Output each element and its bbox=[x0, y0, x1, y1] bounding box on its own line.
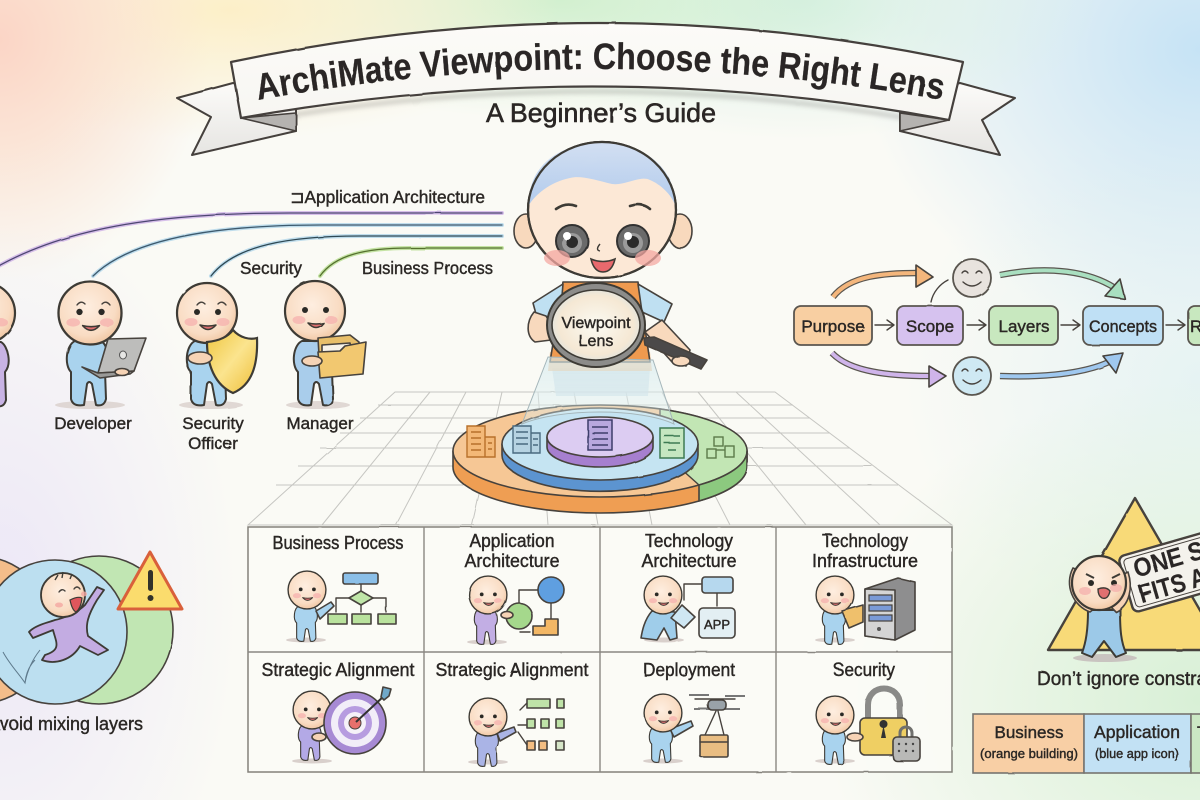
label: security officer: Officer bbox=[188, 434, 238, 453]
arrow: scope to layers bbox=[967, 320, 986, 330]
legend: business bbox=[973, 714, 1084, 773]
cell: business process: Business Process bbox=[272, 533, 404, 553]
step: scope: Scope bbox=[906, 317, 954, 336]
legend: application bbox=[1084, 714, 1191, 773]
step: concepts: Concepts bbox=[1089, 317, 1157, 336]
icon: green network bbox=[707, 437, 734, 458]
cell: strategic alignment flow bbox=[436, 660, 588, 766]
icon: purple document bbox=[588, 420, 612, 450]
arrow: purpose to scope bbox=[875, 320, 894, 330]
lens handle bbox=[644, 337, 707, 369]
arrow: concepts to next bbox=[1166, 320, 1185, 330]
perspective grid floor bbox=[248, 392, 952, 525]
cell: technology architecture: APP bbox=[704, 617, 730, 632]
cell: deployment bbox=[643, 660, 745, 764]
icon: laptop bbox=[82, 338, 146, 378]
venn: orange circle bbox=[0, 556, 52, 704]
cell: technology architecture: Technology bbox=[645, 531, 733, 551]
cell: technology architecture: Architecture bbox=[642, 551, 736, 571]
line: business process bbox=[320, 248, 502, 276]
legend: business: (orange building) bbox=[980, 746, 1078, 761]
hand bbox=[672, 356, 690, 366]
worried character bbox=[1069, 556, 1137, 662]
connector: scope to smiley bbox=[931, 280, 948, 302]
step: next bbox=[1188, 306, 1200, 345]
venn: blue circle bbox=[0, 560, 127, 704]
stakeholder: developer bbox=[55, 282, 146, 409]
banner left tail bbox=[177, 83, 296, 155]
icon: blue building bbox=[513, 426, 540, 453]
magnifier lens bbox=[547, 283, 645, 367]
stakeholder: partial purple figure bbox=[0, 283, 15, 406]
legend: application: Application bbox=[1094, 722, 1180, 742]
body and clothes bbox=[528, 282, 690, 396]
smiley: grey bbox=[953, 259, 991, 297]
cell: application architecture bbox=[464, 531, 564, 644]
step: purpose bbox=[794, 306, 872, 345]
label: security: Security bbox=[240, 258, 302, 278]
icon: green document bbox=[660, 428, 684, 458]
label: security officer bbox=[182, 414, 244, 453]
banner shadow bbox=[245, 91, 945, 125]
line: security bbox=[211, 236, 502, 276]
disc: green sector bbox=[660, 409, 747, 501]
icon: orange building bbox=[467, 426, 495, 457]
brows bbox=[556, 205, 650, 209]
label: security officer: Security bbox=[182, 414, 244, 433]
banner folds bbox=[241, 113, 949, 131]
banner main ribbon bbox=[231, 23, 963, 120]
jumping baby bbox=[29, 572, 108, 662]
cell: strategic alignment target: Strategic Alignment bbox=[262, 660, 414, 680]
cell: technology infrastructure bbox=[812, 531, 918, 644]
step: layers bbox=[989, 306, 1058, 345]
arrow: layers to concepts bbox=[1061, 320, 1080, 330]
cell: strategic alignment flow: Strategic Alignment bbox=[436, 660, 588, 680]
warning triangle large bbox=[1048, 498, 1200, 650]
magnifier lens: Lens bbox=[579, 333, 613, 350]
icon: warning triangle bbox=[118, 552, 182, 609]
arrow: green upper bbox=[1000, 270, 1125, 299]
legend: business: Business bbox=[995, 723, 1063, 742]
line: application architecture bbox=[0, 213, 502, 268]
label: business process: Business Process bbox=[362, 258, 493, 278]
arrow: purple lower bbox=[832, 353, 946, 387]
arrow: orange upper bbox=[833, 265, 933, 297]
legend: technology bbox=[1191, 714, 1200, 773]
stakeholder: manager bbox=[285, 281, 366, 409]
subtitle: A Beginner’s Guide bbox=[486, 98, 716, 128]
cell: deployment: Deployment bbox=[643, 660, 735, 680]
icon: drone bbox=[689, 695, 745, 735]
nose and mouth bbox=[591, 244, 615, 272]
line: developer bbox=[93, 225, 502, 276]
beam of lens bbox=[522, 357, 674, 424]
table grid bbox=[248, 527, 952, 772]
cell: application architecture: Application bbox=[470, 531, 554, 551]
banner right tail bbox=[900, 83, 1015, 155]
blush bbox=[544, 250, 661, 266]
icon: shield bbox=[207, 330, 257, 393]
legend: application: (blue app icon) bbox=[1095, 746, 1179, 761]
stakeholder connection lines bbox=[0, 213, 502, 276]
head bbox=[528, 142, 676, 278]
smiley: blue bbox=[953, 357, 991, 395]
cell: security: Security bbox=[833, 660, 895, 680]
label: developer: Developer bbox=[54, 414, 132, 433]
sign: one size fits all bbox=[1118, 505, 1200, 613]
pitfall: ignoring constraints bbox=[1037, 498, 1200, 690]
disc: purple core bbox=[547, 417, 653, 467]
step: layers: Layers bbox=[998, 317, 1050, 336]
icon: folder bbox=[302, 335, 366, 378]
cell: technology architecture bbox=[641, 531, 736, 642]
ears bbox=[514, 214, 692, 248]
arrow: blue lower bbox=[1000, 353, 1123, 376]
label: application architecture: ⊐Application Architecture bbox=[290, 187, 485, 207]
viewpoints table bbox=[248, 527, 952, 772]
magnifier lens: Viewpoint bbox=[561, 315, 631, 332]
pitfall: mixing layers bbox=[0, 552, 182, 734]
cell: technology infrastructure: Technology bbox=[822, 531, 908, 551]
stakeholder: security officer bbox=[177, 283, 257, 409]
cell: application architecture: Architecture bbox=[464, 551, 560, 571]
title text: ArchiMate Viewpoint: Choose the Right Lens bbox=[258, 42, 944, 100]
cell: security bbox=[815, 660, 920, 764]
legend bbox=[973, 714, 1200, 773]
disc: blue application bbox=[502, 408, 698, 491]
step: scope bbox=[897, 306, 963, 345]
bounce mark bbox=[3, 650, 40, 683]
viewpoint layers disc bbox=[453, 405, 747, 513]
label: manager: Manager bbox=[286, 414, 354, 433]
step: purpose: Purpose bbox=[801, 317, 865, 336]
disc: orange base bbox=[453, 405, 747, 513]
process flow bbox=[794, 259, 1200, 395]
title banner bbox=[176, 21, 1016, 156]
hair bbox=[529, 143, 675, 205]
cell: technology infrastructure: Infrastructure bbox=[812, 551, 918, 571]
eyes bbox=[556, 225, 649, 257]
step: concepts bbox=[1083, 306, 1163, 345]
cell: business process bbox=[272, 533, 404, 642]
venn: green circle bbox=[25, 556, 173, 704]
central character with lens bbox=[514, 142, 707, 424]
cell: strategic alignment target bbox=[262, 660, 414, 764]
